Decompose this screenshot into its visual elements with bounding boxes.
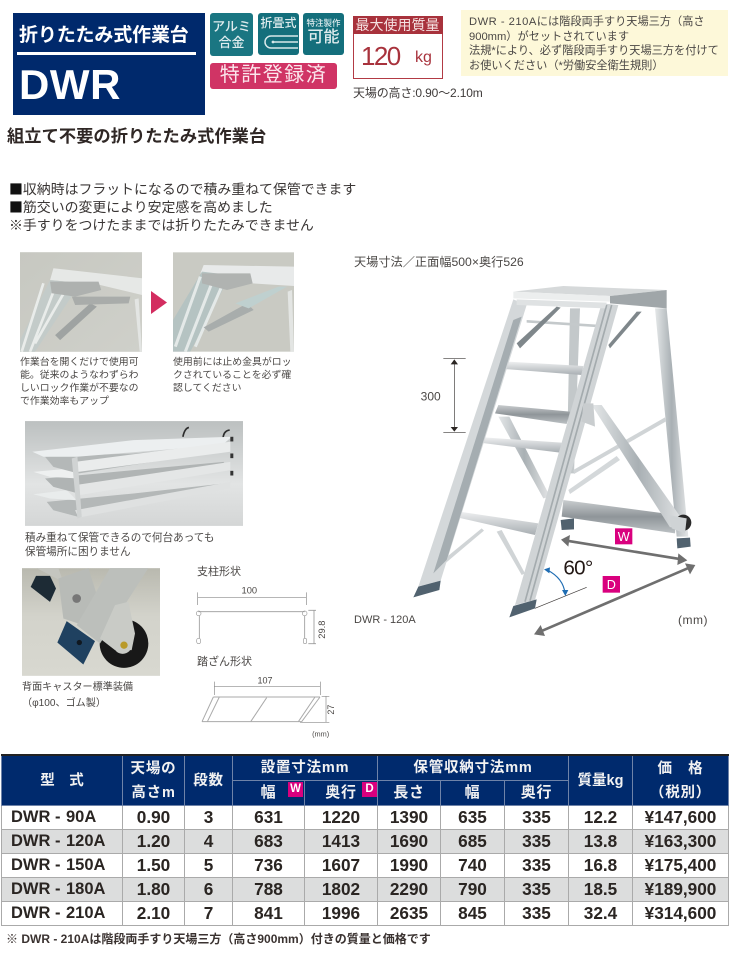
caption: caster: （φ100、ゴム製）: [22, 698, 106, 709]
note box: DWR - 210Aには階段両手すり天場三方（高さ: [469, 16, 705, 28]
icon: folding type: 折畳式: [260, 16, 296, 30]
title block: [13, 13, 205, 115]
caption: stacking: 保管場所に困りません: [25, 546, 131, 558]
note box: 法規*により、必ず階段両手すり天場三方を付けて: [469, 45, 719, 57]
caption: opening: 能。従来のようなわずらわ: [20, 370, 139, 381]
specification table: （税別）: [650, 784, 711, 800]
specification table: 0.90: [137, 807, 170, 827]
specification table: 長さ: [393, 784, 425, 801]
note box: お使いください（*労働安全衛生規則）: [469, 60, 664, 72]
main heading: 組立て不要の折りたたみ式作業台: [7, 126, 266, 146]
caption: lock check: [173, 356, 292, 394]
specification table: 180A: [66, 880, 105, 898]
specification table: 845: [458, 903, 487, 923]
angle 60 degrees: 60°: [563, 557, 593, 580]
label: post section: 支柱形状: [197, 566, 241, 578]
specification table: 335: [522, 879, 551, 899]
dimension: depth D: D: [607, 578, 616, 592]
specification table: 32.4: [584, 903, 617, 923]
specification table: ¥175,400: [645, 855, 716, 875]
specification table: 6: [204, 879, 213, 899]
specification table: ¥314,600: [645, 903, 716, 923]
front stiles and platform: [413, 286, 667, 617]
icon: aluminium alloy: アルミ: [212, 19, 251, 34]
dimension: width W: [561, 528, 687, 565]
label: model pictured: DWR - 120A: [354, 614, 416, 626]
specification table: 1.50: [137, 855, 170, 875]
specification table: 幅: [261, 784, 276, 801]
specification table: W: [290, 783, 301, 795]
caption: caster: [22, 681, 133, 709]
specification table: 型 式: [40, 772, 84, 788]
specification table: 635: [458, 807, 487, 827]
specification table: DWR -: [11, 904, 60, 922]
specification table: 18.5: [584, 879, 617, 899]
specification table: 1802: [322, 879, 360, 899]
platform height range: 天場の高さ:0.90～2.10m: [353, 86, 483, 100]
specification table: 1996: [322, 903, 360, 923]
specification table: 335: [522, 855, 551, 875]
specification table: 奥行: [521, 784, 552, 801]
label: step section: 踏ざん形状: [197, 656, 252, 668]
specification table: 幅: [465, 784, 480, 801]
specification table: 段数: [193, 772, 224, 788]
specification table: 2.10: [137, 903, 170, 923]
icon: folding type: [258, 13, 299, 55]
product category heading: 折りたたみ式作業台: [19, 25, 189, 46]
specification table: 1220: [322, 807, 360, 827]
specification table: 5: [204, 855, 213, 875]
specification table: 価 格: [658, 760, 703, 776]
specification table: DWR -: [11, 880, 60, 898]
specification table: D: [365, 783, 374, 795]
caption: caster: 背面キャスター標準装備: [22, 682, 133, 693]
specification table: 1690: [390, 831, 428, 851]
note box: [461, 10, 728, 76]
specification table: 1390: [390, 807, 428, 827]
specification table: 790: [458, 879, 487, 899]
specification table: 683: [254, 831, 283, 851]
specification table: 7: [204, 903, 213, 923]
specification table: 90A: [66, 808, 96, 826]
specification table: 736: [254, 855, 283, 875]
label: unit: (mm): [678, 613, 708, 627]
icon: aluminium alloy: 合金: [218, 35, 244, 50]
icon: custom made available: 特注製作: [306, 18, 340, 28]
specification table: 設置寸法mm: [261, 760, 349, 776]
specification table: 631: [254, 807, 283, 827]
specification table: 335: [522, 807, 551, 827]
caption: stacking: [25, 532, 214, 558]
diagram: post section: 29.8: [317, 621, 327, 639]
photo: stacked units: [25, 421, 243, 526]
illustration: step stool with dimensions: [413, 286, 696, 636]
specification table: 質量kg: [578, 772, 623, 788]
specification table: 2635: [390, 903, 428, 923]
specification table: 335: [522, 903, 551, 923]
specification table: 12.2: [584, 807, 617, 827]
specification table: 335: [522, 831, 551, 851]
max load label: 最大使用質量: [356, 17, 440, 33]
specification table: DWR -: [11, 832, 60, 850]
photo: closed lock: [20, 252, 142, 352]
caption: opening: しいロック作業が不要なの: [20, 383, 139, 394]
specification table: 150A: [66, 856, 105, 874]
note box: 900mm）がセットされています: [469, 31, 629, 43]
specification table: 1990: [390, 855, 428, 875]
specification table: 16.8: [584, 855, 617, 875]
specification table: DWR -: [11, 808, 60, 826]
diagram: post section: [196, 586, 327, 644]
caption: stacking: 積み重ねて保管できるので何台あっても: [25, 532, 214, 544]
specification table: [1, 754, 729, 926]
specification table: 13.8: [584, 831, 617, 851]
specification table: 685: [458, 831, 487, 851]
rear structure: [435, 307, 691, 575]
caption: opening: で作業効率もアップ: [20, 396, 109, 407]
specification table: 高さm: [131, 784, 176, 800]
photo: caster: [22, 568, 160, 676]
angle 60 degrees: [535, 557, 593, 608]
specification table: ¥189,900: [645, 879, 716, 899]
patent badge: 特許登録済: [220, 64, 327, 86]
photo: locked: [173, 252, 294, 352]
max load value: 120: [361, 41, 400, 71]
feature list: ■筋交いの変更により安定感を高めました: [9, 197, 273, 217]
specification table: 1413: [322, 831, 360, 851]
specification table: 天場の: [131, 760, 176, 776]
specification table: 保管収納寸法mm: [413, 760, 533, 776]
specification table: 210A: [66, 904, 105, 922]
diagram: step section: (mm): [312, 730, 329, 739]
diagram: step section: 107: [257, 676, 273, 686]
label: platform size: 天場寸法／正面幅500×奥行526: [354, 255, 524, 269]
max load box: [353, 16, 443, 79]
specification table: 2290: [390, 879, 428, 899]
specification table: 788: [254, 879, 283, 899]
arrow: before to after: [151, 291, 167, 314]
specification table: 1.20: [137, 831, 170, 851]
specification table: 3: [204, 807, 213, 827]
dimension: step pitch 300: [421, 358, 466, 432]
icon: custom made available: 可能: [307, 29, 340, 46]
icon: aluminium alloy: [210, 13, 253, 56]
dimension: width W: W: [618, 530, 630, 544]
specification table: 奥行: [325, 784, 357, 801]
specification table: 1.80: [137, 879, 170, 899]
specification table: ¥163,300: [645, 831, 716, 851]
max load unit: kg: [415, 49, 432, 66]
diagram: step section: 27: [326, 705, 336, 715]
specification table: DWR -: [11, 856, 60, 874]
specification table: ¥147,600: [645, 807, 716, 827]
caption: lock check: クされていることを必ず確: [173, 370, 291, 381]
dimension: depth D: [534, 563, 695, 636]
caption: lock check: 認してください: [173, 383, 242, 394]
dimension: step pitch 300: 300: [421, 389, 441, 403]
specification table: 740: [458, 855, 487, 875]
caption: lock check: 使用前には止め金具がロッ: [173, 356, 292, 368]
caption: opening: 作業台を開くだけで使用可: [20, 356, 139, 368]
feature list: ※手すりをつけたままでは折りたたみできません: [9, 217, 314, 233]
specification table: 120A: [66, 832, 105, 850]
diagram: step section: [202, 676, 336, 739]
treads: [447, 361, 583, 535]
model name: DWR: [19, 61, 121, 108]
feature list: [9, 179, 356, 233]
specification table: 841: [254, 903, 283, 923]
diagram: post section: 100: [242, 586, 257, 596]
caption: opening: [20, 356, 139, 407]
feature list: ■収納時はフラットになるので積み重ねて保管できます: [9, 179, 356, 199]
icon: custom made available: [303, 13, 344, 55]
specification table: 4: [204, 831, 213, 851]
specification table: 1607: [322, 855, 360, 875]
table footnote: ※ DWR - 210Aは階段両手すり天場三方（高さ900mm）付きの質量と価格です: [6, 932, 431, 946]
